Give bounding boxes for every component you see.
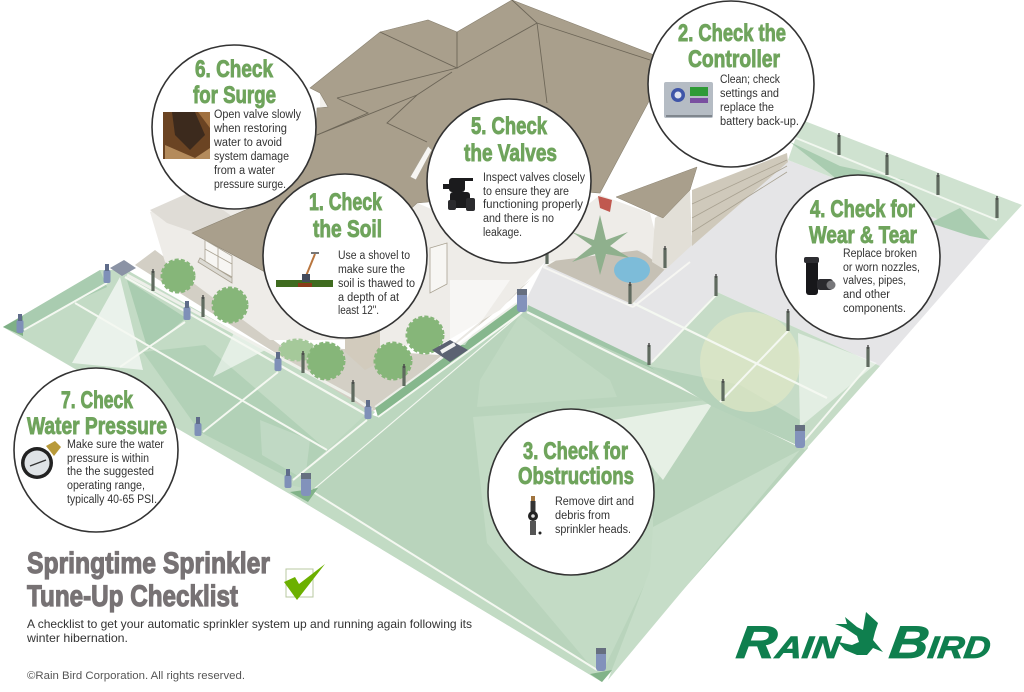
- panel: 3. check for obstructions: [488, 409, 654, 575]
- text: soil instructions: soil is thawed to: [338, 278, 415, 290]
- text: surge instructions: when restoring: [213, 123, 287, 135]
- text: surge instructions: Open valve slowly: [214, 109, 301, 121]
- text: wear and tear instructions: Replace broken: [843, 248, 917, 260]
- icon: valve: [443, 178, 475, 211]
- heading: 4. check for wear and tear: 4. Check for: [810, 196, 915, 223]
- text: pressure instructions: [67, 439, 164, 506]
- icon: hands at valve box photo: [163, 112, 210, 159]
- lawn: upper right strip: [788, 120, 1022, 240]
- lawn: right: [633, 292, 880, 450]
- text: obstruction instructions: [555, 496, 634, 536]
- text: pressure instructions: Make sure the water: [67, 439, 164, 451]
- lawn: main front: [290, 305, 808, 682]
- garage siding: [692, 153, 788, 246]
- text: surge instructions: [213, 109, 301, 191]
- heading: 7. check water pressure: Water Pressure: [27, 413, 167, 440]
- text: valve instructions: functioning properly: [483, 199, 583, 211]
- heading: 5. check the valves: 5. Check: [471, 113, 548, 140]
- text: surge instructions: system damage: [214, 151, 289, 163]
- icon: shovel in soil: [276, 252, 333, 287]
- text: surge instructions: water to avoid: [213, 137, 282, 149]
- heading: 3. check for obstructions: 3. Check for: [523, 438, 628, 465]
- text: valve instructions: and there is no: [483, 213, 554, 225]
- agave plants: [572, 196, 650, 283]
- text: valve instructions: to ensure they are: [483, 186, 569, 198]
- title: Tune-Up Checklist: [27, 580, 238, 613]
- text: obstruction instructions: sprinkler heads.: [555, 524, 631, 536]
- subtitle: [26, 617, 472, 645]
- text: controller instructions: settings and: [720, 88, 779, 100]
- lawn: side strip between house bed and main lawn: [290, 312, 522, 490]
- panel: 7. check water pressure: [14, 368, 178, 532]
- heading: 6. check for surge: 6. Check: [195, 56, 274, 83]
- subtitle: A checklist to get your automatic sprinkler system up and running again following its: [27, 617, 472, 631]
- text: controller instructions: Clean; check: [720, 74, 780, 86]
- lawn: left: [3, 270, 375, 500]
- text: wear and tear instructions: [843, 248, 920, 315]
- heading: 6. check for surge: [193, 56, 276, 109]
- text: soil instructions: least 12".: [338, 305, 379, 317]
- text: pressure instructions: operating range,: [67, 480, 145, 492]
- panel: 4. check for wear and tear: [776, 175, 940, 339]
- icon: bird: [835, 612, 883, 655]
- logo: rain bird: BIRD: [887, 616, 995, 668]
- text: wear and tear instructions: valves, pipes,: [843, 275, 906, 287]
- icon: pressure gauge: [21, 441, 61, 479]
- icon: sprinkler head: [528, 496, 542, 535]
- text: soil instructions: [338, 250, 415, 317]
- copyright: ©Rain Bird Corporation. All rights reserved.: [27, 670, 245, 682]
- text: pressure instructions: the the suggested: [67, 466, 154, 478]
- icon: checkmark: [284, 564, 325, 600]
- windows: [198, 146, 447, 293]
- sprinkler heads: [16, 133, 999, 671]
- text: controller instructions: replace the: [720, 102, 774, 114]
- roof: [192, 0, 697, 272]
- heading: 3. check for obstructions: [518, 438, 634, 490]
- spray overlay near front entry: [450, 280, 510, 345]
- house walls: [150, 90, 692, 370]
- text: valve instructions: [483, 172, 585, 239]
- shrubs: [162, 260, 443, 379]
- text: soil instructions: Use a shovel to: [338, 250, 410, 262]
- text: surge instructions: from a water: [214, 165, 275, 177]
- heading: 1. check the soil: the Soil: [313, 216, 382, 243]
- heading: 2. check the controller: 2. Check the: [678, 20, 786, 47]
- subtitle: winter hibernation.: [26, 631, 128, 645]
- text: soil instructions: make sure the: [338, 264, 405, 276]
- text: valve instructions: leakage.: [483, 227, 522, 239]
- heading: 1. check the soil: [309, 189, 382, 243]
- panel: 6. check for surge: [152, 45, 316, 209]
- text: pressure instructions: pressure is within: [67, 453, 149, 465]
- heading: 3. check for obstructions: Obstructions: [518, 463, 634, 490]
- logo: rain bird: RAIN: [734, 616, 846, 668]
- text: controller instructions: battery back-up.: [720, 116, 799, 128]
- heading: 4. check for wear and tear: [809, 196, 917, 249]
- panel: 2. check the controller: [648, 1, 814, 167]
- heading: 5. check the valves: the Valves: [464, 140, 557, 167]
- valve boxes: [110, 260, 468, 362]
- text: pressure instructions: typically 40-65 PSI.: [67, 494, 157, 506]
- heading: 2. check the controller: Controller: [688, 46, 780, 73]
- planting beds: [127, 232, 690, 417]
- icon: broken sprinkler parts: [804, 257, 836, 295]
- panel: 5. check the valves: [427, 99, 591, 263]
- driveway: [522, 160, 990, 366]
- text: soil instructions: a depth of at: [338, 292, 400, 304]
- panel: 1. check the soil: [263, 174, 427, 338]
- heading: 6. check for surge: for Surge: [193, 82, 276, 109]
- heading: 2. check the controller: [678, 20, 786, 73]
- text: wear and tear instructions: components.: [843, 303, 906, 315]
- text: wear and tear instructions: or worn nozzles,: [843, 262, 920, 274]
- heading: 7. check water pressure: [27, 387, 167, 440]
- text: controller instructions: [720, 74, 799, 128]
- title: Springtime Sprinkler: [27, 547, 270, 580]
- heading: 4. check for wear and tear: Wear & Tear: [809, 222, 917, 249]
- logo: rain bird: [734, 612, 995, 668]
- heading: 1. check the soil: 1. Check: [309, 189, 382, 216]
- text: obstruction instructions: Remove dirt and: [555, 496, 634, 508]
- text: wear and tear instructions: and other: [843, 289, 890, 301]
- text: surge instructions: pressure surge.: [214, 179, 286, 191]
- heading: 7. check water pressure: 7. Check: [61, 387, 133, 414]
- text: valve instructions: Inspect valves closely: [483, 172, 585, 184]
- text: obstruction instructions: debris from: [555, 510, 610, 522]
- icon: controller: [664, 82, 713, 118]
- title: [27, 547, 270, 613]
- heading: 5. check the valves: [464, 113, 557, 167]
